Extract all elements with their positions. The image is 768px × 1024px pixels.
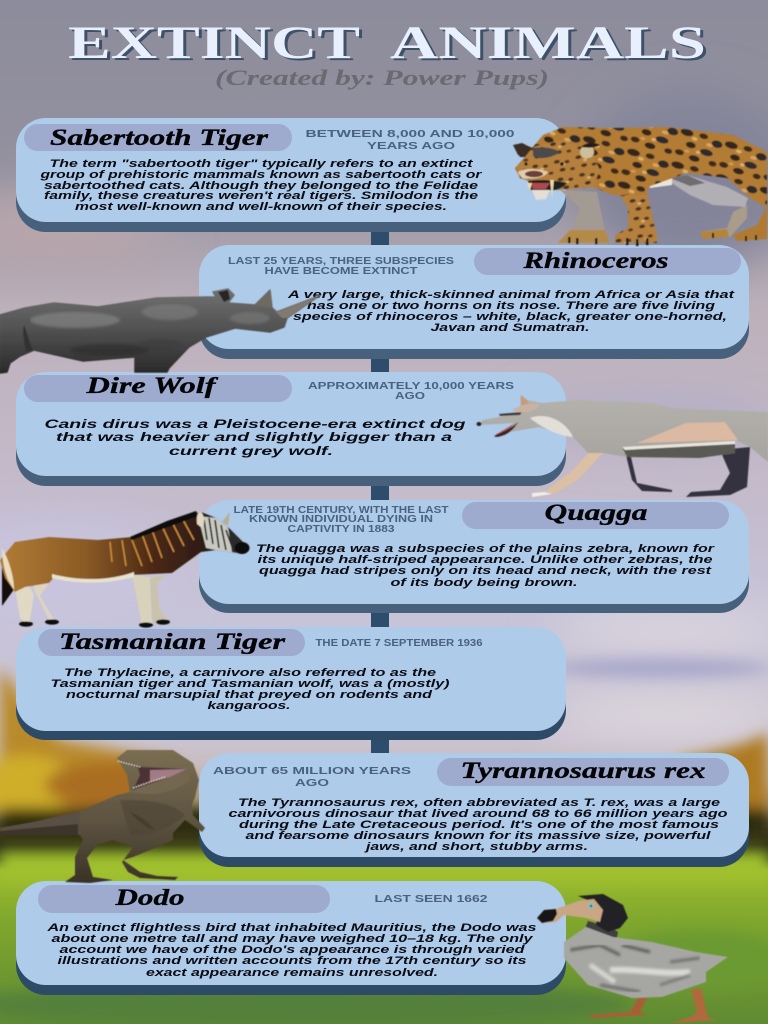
panel: Dodo <box>16 881 566 995</box>
description: Quagga: The quagga was a subspecies of the plains zebra, known for <box>256 543 715 555</box>
description: Dire Wolf: current grey wolf. <box>169 444 333 458</box>
description: Quagga <box>256 543 715 589</box>
description: Tyrannosaurus rex: and fearsome dinosaurs known for its massive size, powerful <box>246 830 712 842</box>
name pill: Dodo <box>38 885 330 913</box>
description: Tasmanian Tiger: kangaroos. <box>208 700 291 712</box>
date: Dire Wolf <box>308 380 514 402</box>
illustration: dodo <box>537 894 728 1023</box>
description: Rhinoceros: Javan and Sumatran. <box>430 322 590 334</box>
description: Tasmanian Tiger <box>50 667 450 712</box>
panel: Tasmanian Tiger <box>16 627 566 740</box>
panel: Sabertooth Tiger <box>16 118 566 232</box>
date: Sabertooth Tiger <box>306 128 515 152</box>
description: Dodo: An extinct flightless bird that inhabited Mauritius, the Dodo was <box>46 922 537 934</box>
description: Rhinoceros: species of rhinoceros – white, black, greater one-horned, <box>293 311 727 323</box>
subtitle: (Created by: Power Pups) <box>215 65 549 90</box>
description: Tasmanian Tiger: nocturnal marsupial that preyed on rodents and <box>66 689 433 701</box>
description: Tyrannosaurus rex <box>228 797 728 853</box>
description: Quagga: quagga had stripes only on its head and neck, with the rest <box>259 565 712 577</box>
illustration: tyrannosaurus rex <box>0 750 205 883</box>
description: Rhinoceros: A very large, thick-skinned animal from Africa or Asia that <box>286 289 735 301</box>
illustration: quagga <box>0 511 250 628</box>
description: Dodo: about one metre tall and may have weighed 10–18 kg. The only <box>52 933 534 945</box>
date: Dire Wolf: AGO <box>395 390 425 402</box>
description: Tasmanian Tiger: The Thylacine, a carnivore also referred to as the <box>64 667 436 679</box>
date: Rhinoceros: HAVE BECOME EXTINCT <box>264 265 418 277</box>
date: Sabertooth Tiger: BETWEEN 8,000 AND 10,000 <box>306 128 515 140</box>
description: Sabertooth Tiger: sabertoothed cats. Although they belonged to the Felidae <box>44 180 478 192</box>
date: Quagga: LATE 19TH CENTURY, WITH THE LAST <box>234 504 449 516</box>
description: Dodo: account we have of the Dodo's appearance is through varied <box>60 944 525 956</box>
description: Tyrannosaurus rex: The Tyrannosaurus rex, often abbreviated as T. rex, was a large <box>238 797 720 809</box>
description: Sabertooth Tiger: most well-known and well-known of their species. <box>75 201 447 213</box>
description: Tyrannosaurus rex: during the Late Cretaceous period. It's one of the most famous <box>239 819 719 831</box>
name pill: Quagga: Quagga <box>544 500 648 525</box>
date: Quagga: KNOWN INDIVIDUAL DYING IN <box>249 513 433 525</box>
name pill: Sabertooth Tiger: Sabertooth Tiger <box>50 125 269 150</box>
description: Sabertooth Tiger <box>39 158 483 213</box>
description: Dodo: illustrations and written accounts from the 17th century so its <box>58 955 527 967</box>
description: Sabertooth Tiger: The term "sabertooth tiger" typically refers to an extinct <box>50 158 473 170</box>
description: Dire Wolf <box>44 417 466 458</box>
date: Tyrannosaurus rex <box>213 765 411 789</box>
date: Dire Wolf: APPROXIMATELY 10,000 YEARS <box>308 380 514 392</box>
name pill: Dodo: Dodo <box>114 885 184 910</box>
description: Dire Wolf: that was heavier and slightly bigger than a <box>56 430 452 444</box>
description: Dodo: exact appearance remains unresolved. <box>146 967 438 979</box>
name pill: Quagga <box>462 500 729 529</box>
title <box>68 17 709 71</box>
description: Sabertooth Tiger: family, these creatures weren't real tigers. Smilodon is the <box>44 190 478 202</box>
date: Rhinoceros: LAST 25 YEARS, THREE SUBSPECIES <box>228 255 454 267</box>
name pill: Tyrannosaurus rex <box>437 758 729 786</box>
name pill: Dire Wolf: Dire Wolf <box>85 373 219 398</box>
title: ANIMALS <box>390 17 706 69</box>
description: Tyrannosaurus rex: jaws, and short, stubby arms. <box>363 841 588 853</box>
description: Tasmanian Tiger: Tasmanian tiger and Tasmanian wolf, was a (mostly) <box>50 678 450 690</box>
description: Sabertooth Tiger: group of prehistoric mammals known as sabertooth cats or <box>39 169 483 181</box>
description: Rhinoceros <box>286 289 735 334</box>
illustration: sabertooth tiger <box>513 127 767 246</box>
name pill: Dire Wolf <box>24 373 292 402</box>
name pill: Rhinoceros <box>474 248 741 275</box>
title: EXTINCT <box>68 17 360 69</box>
description: Dodo <box>46 922 537 979</box>
date: Dodo: LAST SEEN 1662 <box>374 893 488 905</box>
description: Rhinoceros: has one or two horns on its nose. There are five living <box>307 300 716 312</box>
name pill: Tyrannosaurus rex: Tyrannosaurus rex <box>460 758 706 783</box>
description: Quagga: of its body being brown. <box>390 577 578 589</box>
name pill: Tasmanian Tiger <box>38 629 305 656</box>
title: ANIMALS <box>393 19 709 71</box>
date: Tyrannosaurus rex: ABOUT 65 MILLION YEARS <box>213 765 411 777</box>
name pill: Tasmanian Tiger: Tasmanian Tiger <box>59 629 286 654</box>
name pill: Sabertooth Tiger <box>24 124 292 151</box>
timeline connector <box>371 225 389 755</box>
panel: Rhinoceros <box>199 245 749 359</box>
date: Rhinoceros <box>228 255 454 277</box>
illustration: dire wolf <box>476 395 768 497</box>
date: Tasmanian Tiger: THE DATE 7 SEPTEMBER 1936 <box>316 637 483 649</box>
date: Sabertooth Tiger: YEARS AGO <box>367 140 455 152</box>
date: Quagga: CAPTIVITY IN 1883 <box>288 523 395 535</box>
panel: Dire Wolf <box>16 372 566 486</box>
date: Quagga <box>234 504 449 535</box>
description: Quagga: its unique half-striped appearance. Unlike other zebras, the <box>258 554 713 566</box>
panel: Tyrannosaurus rex <box>199 753 749 867</box>
illustration: rhinoceros <box>0 289 319 373</box>
description: Tyrannosaurus rex: carnivorous dinosaur that lived around 68 to 66 million years ago <box>228 808 728 820</box>
title: EXTINCT <box>71 19 363 71</box>
name pill: Rhinoceros: Rhinoceros <box>522 248 669 273</box>
description: Dire Wolf: Canis dirus was a Pleistocene-era extinct dog <box>44 417 466 431</box>
date: Tyrannosaurus rex: AGO <box>295 777 329 789</box>
panel: Quagga <box>199 500 749 613</box>
